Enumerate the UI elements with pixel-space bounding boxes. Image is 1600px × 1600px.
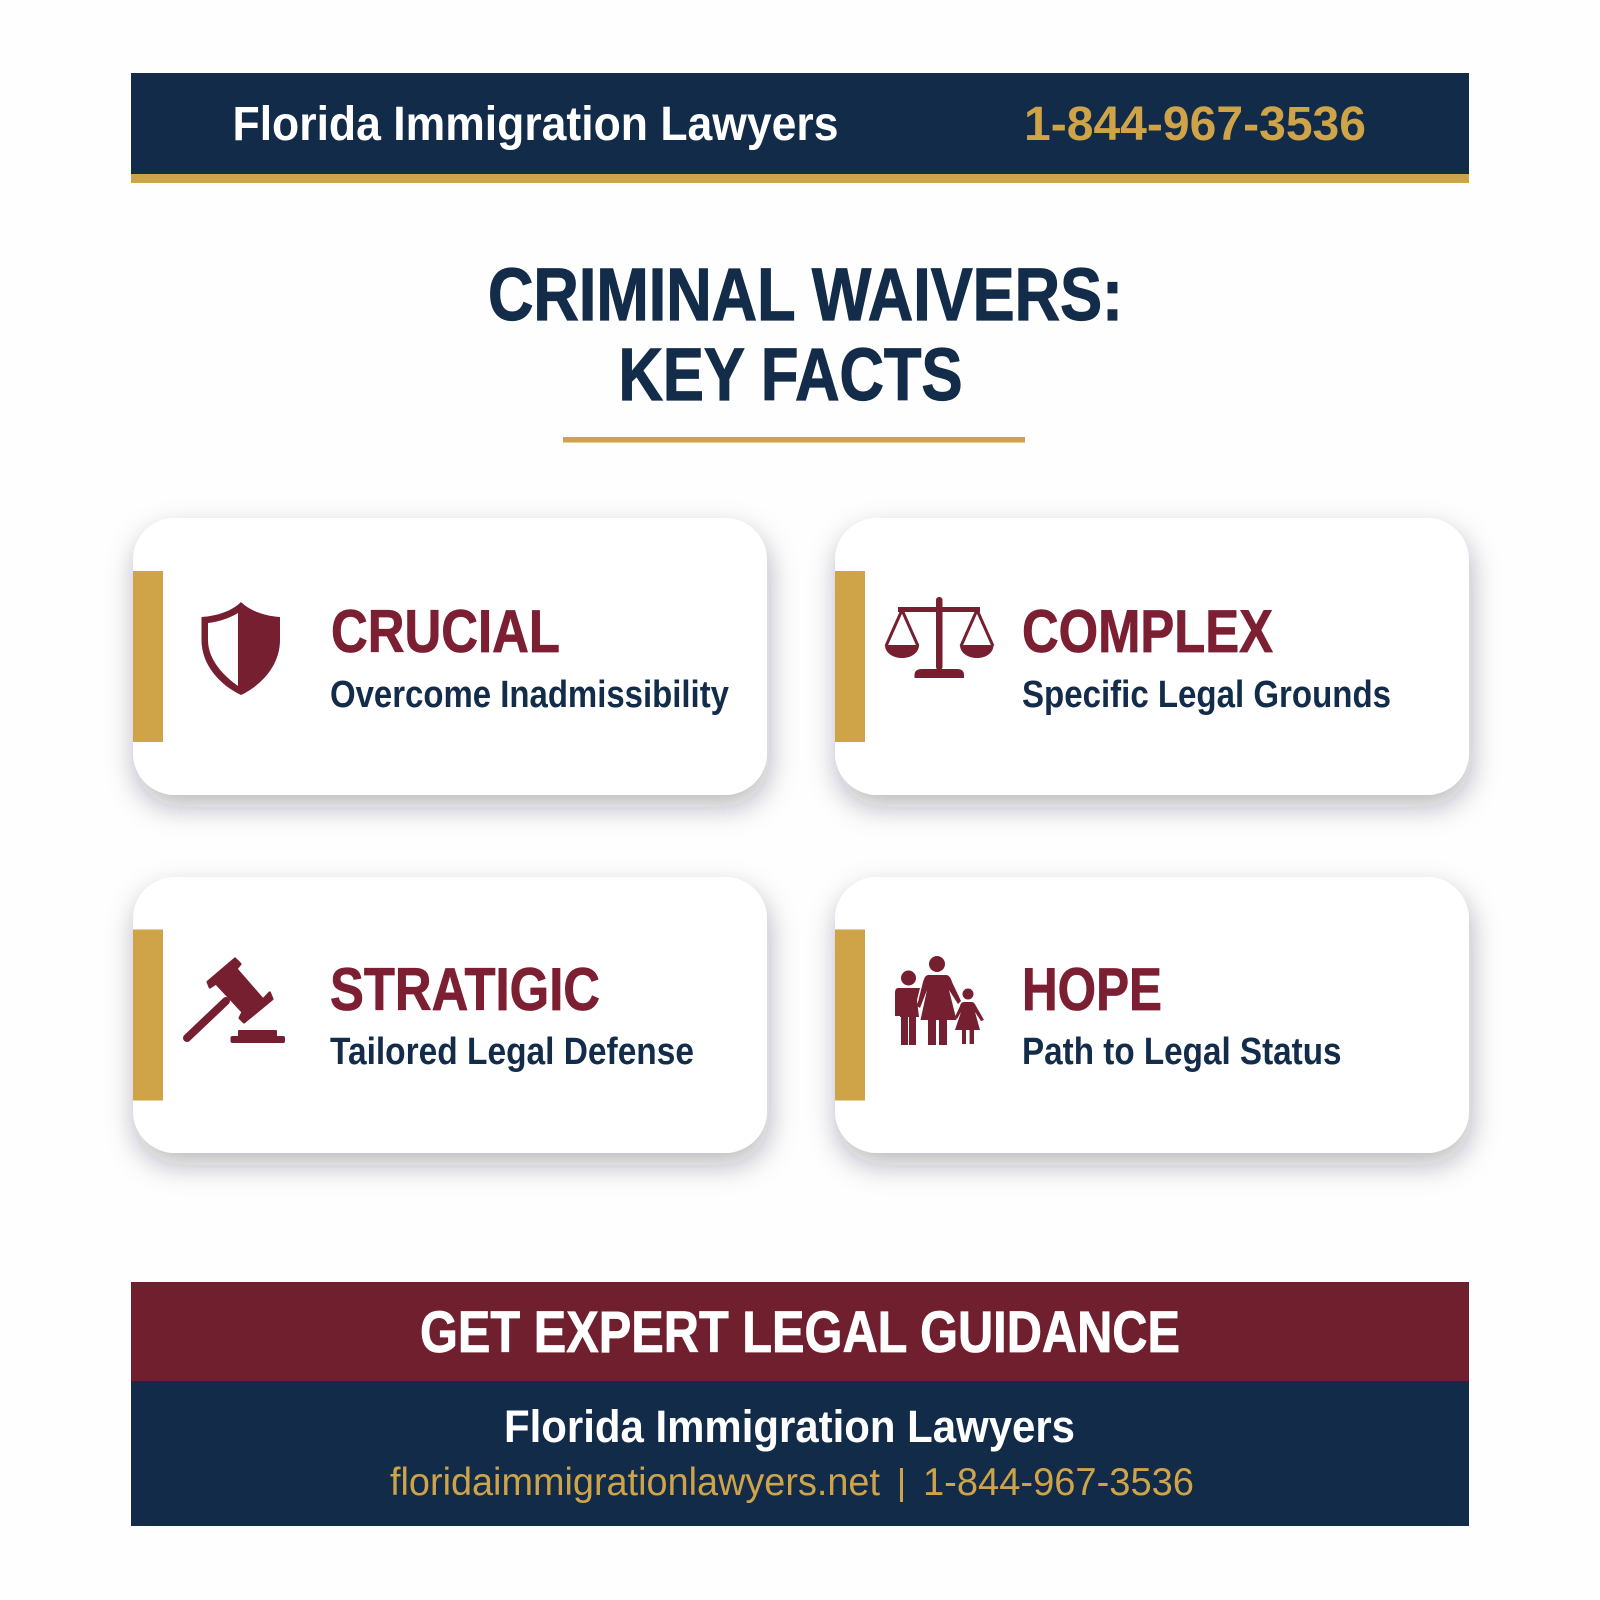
icon: gavel [187,959,285,1043]
text: overcome inadmissibility: Overcome Inadmissibility [330,674,729,716]
footer website and phone [390,1461,1194,1504]
call to action banner: GET EXPERT LEGAL GUIDANCE [420,1300,1180,1365]
text: specific legal grounds: Specific Legal Grounds [1022,674,1391,716]
footer website and phone: 1-844-967-3536 [923,1461,1194,1504]
panel: hope [835,877,1469,1153]
panel: strategic [133,877,767,1153]
footer website and phone: floridaimmigrationlawyers.net [390,1461,880,1504]
icon: shield [202,602,280,695]
icon: family [895,956,984,1045]
icon: scales [885,597,994,678]
heading: crucial: CRUCIAL [331,598,560,665]
panel: complex [835,518,1469,795]
call to action banner [131,1282,1469,1381]
phone number: 1-844-967-3536 [1024,98,1366,151]
title [488,253,1123,442]
footer firm name: Florida Immigration Lawyers [504,1401,1075,1452]
heading: hope: HOPE [1022,956,1162,1023]
title: CRIMINAL WAIVERS: [488,253,1123,336]
text: path to legal status: Path to Legal Status [1022,1031,1342,1073]
text: tailored legal defense: Tailored Legal Defense [330,1031,694,1073]
heading: stratigic: STRATIGIC [330,956,600,1023]
header banner [131,73,1469,183]
firm name: Florida Immigration Lawyers [232,98,838,151]
footer contact panel [131,1381,1469,1526]
heading: complex: COMPLEX [1022,598,1273,665]
panel: crucial [133,518,767,795]
title: KEY FACTS [618,333,962,416]
